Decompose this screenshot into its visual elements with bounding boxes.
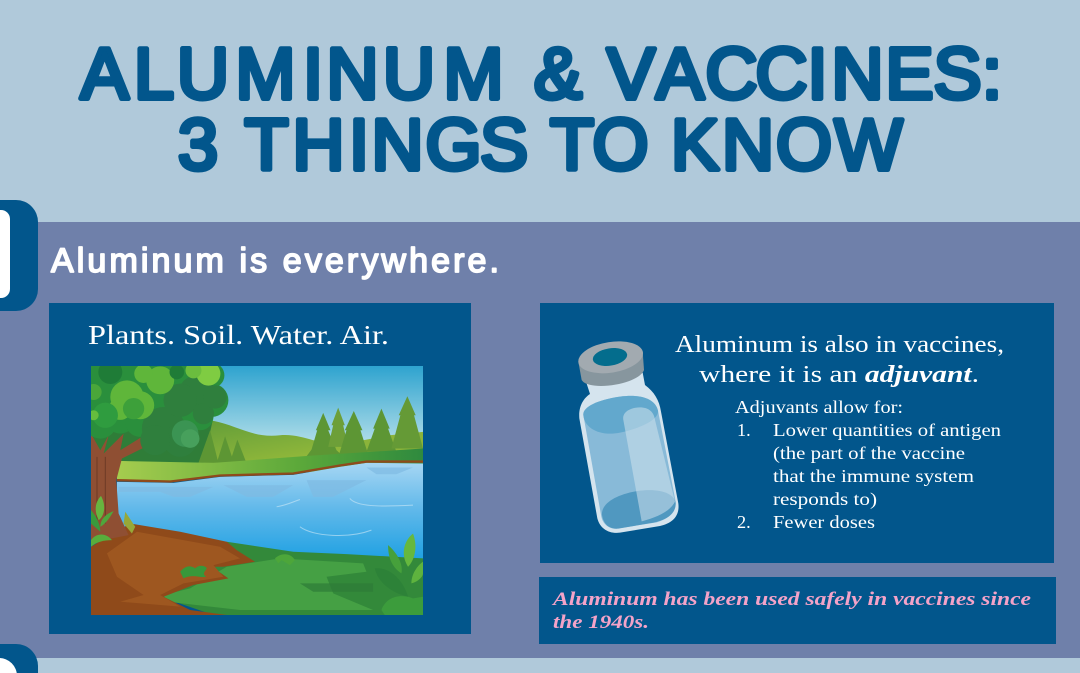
numbered list: Fewer doses — [773, 512, 875, 532]
panel: plants soil water air — [49, 303, 471, 634]
numbered list: 1. — [737, 420, 751, 440]
title: 3 THINGS TO KNOW — [178, 106, 902, 186]
sky — [91, 366, 423, 466]
title — [78, 34, 1002, 186]
numbered list: Lower quantities of antigen — [773, 420, 1001, 440]
number tab: section 2 — [0, 644, 38, 673]
number tab: section 1 — [0, 200, 38, 311]
foreground plants — [91, 496, 423, 615]
section band: aluminum is everywhere — [0, 222, 1080, 658]
panel intro text — [675, 331, 1004, 388]
cap — [578, 352, 644, 386]
tree canopy — [84, 360, 228, 457]
numbered list: Adjuvants allow for: — [735, 397, 903, 417]
pine trees — [198, 396, 423, 463]
panel intro text: where it is an adjuvant . — [699, 361, 979, 388]
liquid — [583, 396, 676, 529]
callout: used safely since the 1940s — [539, 577, 1056, 644]
panel caption: Plants. Soil. Water. Air. — [88, 319, 389, 350]
hills — [164, 421, 423, 465]
icon: vaccine vial — [578, 341, 679, 533]
section heading: Aluminum is everywhere. — [51, 242, 499, 280]
water ripples — [119, 468, 413, 497]
callout text — [552, 589, 1032, 633]
numbered list: responds to) — [773, 489, 877, 510]
numbered list: 2. — [737, 512, 751, 532]
panel intro text: Aluminum is also in vaccines, — [675, 331, 1004, 358]
numbered list: that the immune system — [773, 466, 974, 486]
title: ALUMINUM & VACCINES: — [80, 34, 1002, 114]
near soil — [91, 523, 255, 615]
shoreline — [117, 462, 423, 482]
near grass — [160, 542, 423, 615]
callout text: the 1940s. — [553, 612, 649, 633]
lake — [117, 463, 423, 563]
far bank — [117, 449, 423, 482]
numbered list: (the part of the vaccine — [773, 443, 965, 464]
panel: adjuvant explanation — [540, 303, 1054, 563]
bushes behind tree — [91, 417, 213, 464]
glass body — [579, 373, 679, 533]
highlight — [623, 407, 675, 521]
tree trunk — [91, 434, 152, 542]
numbered list — [735, 397, 1001, 532]
illustration: lake landscape — [91, 366, 423, 615]
callout text: Aluminum has been used safely in vaccines since — [552, 589, 1032, 610]
